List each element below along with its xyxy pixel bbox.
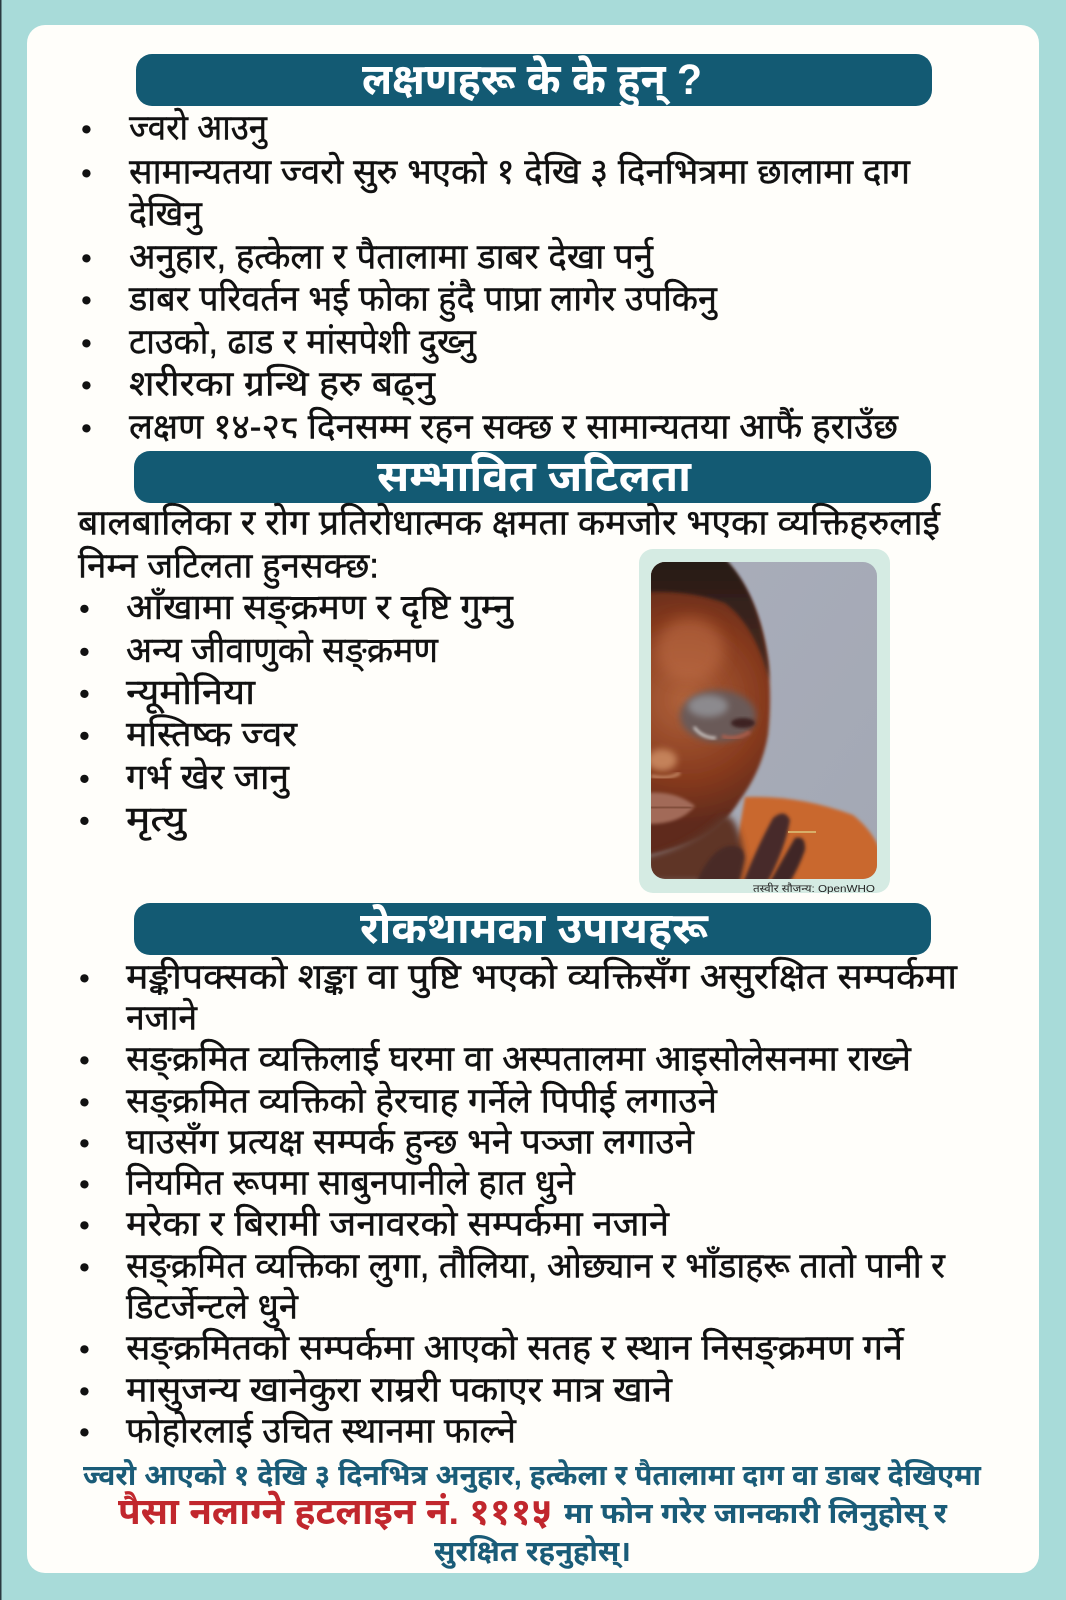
complications bullet list: •	[79, 803, 90, 838]
section: complications	[78, 451, 941, 895]
prevention bullet list: नजाने	[126, 998, 198, 1038]
footer hotline message: पैसा नलाग्ने हटलाइन नं. १११५	[118, 1490, 552, 1532]
footer hotline message: ज्वरो आएको १ देखि ३ दिनभित्र अनुहार, हत्केला र पैतालामा दाग वा डाबर देखिएमा	[83, 1458, 981, 1493]
prevention bullet list: मासुजन्य खानेकुरा राम्ररी पकाएर मात्र खाने	[126, 1370, 673, 1410]
symptoms bullet list: डाबर परिवर्तन भई फोका हुंदै पाप्रा लागेर उपकिनु	[128, 278, 718, 322]
prevention bullet list: सङ्क्रमितको सम्पर्कमा आएको सतह र स्थान निसङ्क्रमण गर्ने	[126, 1328, 905, 1369]
section: prevention	[79, 903, 958, 1450]
symptoms bullet list: •	[81, 156, 92, 190]
complications bullet list: •	[79, 591, 90, 626]
heading: prevention	[134, 903, 931, 955]
complications bullet list: •	[79, 718, 90, 753]
complications bullet list: मृत्यु	[126, 800, 187, 841]
heading: symptoms: लक्षणहरू के के हुन् ?	[362, 55, 702, 110]
forehead shine	[656, 618, 724, 682]
prevention bullet list: •	[79, 960, 90, 996]
photo credit caption: तस्वीर सौजन्य: OpenWHO	[753, 882, 875, 895]
footer hotline message	[83, 1458, 981, 1569]
symptoms bullet list: •	[81, 112, 92, 146]
section: symptoms	[81, 54, 932, 446]
symptoms bullet list: •	[81, 326, 92, 360]
complications bullet list: •	[79, 676, 90, 711]
complications bullet list: गर्भ खेर जानु	[126, 757, 290, 798]
shirt	[730, 797, 880, 882]
prevention bullet list: फोहोरलाई उचित स्थानमा फाल्ने	[126, 1410, 517, 1450]
symptoms bullet list: •	[81, 368, 92, 402]
symptoms bullet list: •	[81, 282, 92, 318]
prevention bullet list: •	[79, 1374, 90, 1408]
symptoms bullet list: देखिनु	[129, 194, 203, 234]
lips	[645, 793, 695, 824]
photo: child with eye infection	[645, 556, 880, 885]
prevention bullet list: मङ्कीपक्सको शङ्का वा पुष्टि भएको व्यक्तिसँग असुरक्षित सम्पर्कमा	[126, 956, 958, 998]
symptoms bullet list: शरीरका ग्रन्थि हरु बढ्नु	[129, 364, 436, 405]
complications bullet list: मस्तिष्क ज्वर	[126, 714, 298, 754]
symptoms bullet list: सामान्यतया ज्वरो सुरु भएको १ देखि ३ दिनभित्रमा छालामा दाग	[129, 152, 911, 192]
symptoms bullet list: अनुहार, हत्केला र पैतालामा डाबर देखा पर्नु	[129, 236, 654, 278]
complications bullet list: अन्य जीवाणुको सङ्क्रमण	[126, 630, 439, 671]
symptoms bullet list: ज्वरो आउनु	[129, 108, 268, 148]
heading: complications: सम्भावित जटिलता	[377, 452, 692, 501]
prevention bullet list: डिटर्जेन्टले धुने	[126, 1286, 299, 1328]
footer hotline message: सुरक्षित रहनुहोस्।	[434, 1535, 631, 1569]
photo panel with caption	[639, 549, 890, 895]
complications intro text	[78, 502, 941, 590]
heading: complications	[134, 451, 931, 503]
prevention bullet list	[79, 956, 958, 1450]
heading: symptoms	[136, 54, 932, 110]
prevention bullet list: सङ्क्रमित व्यक्तिलाई घरमा वा अस्पतालमा आइसोलेसनमा राख्ने	[126, 1038, 912, 1080]
fingers	[697, 846, 746, 879]
symptoms bullet list	[81, 108, 911, 446]
prevention bullet list: •	[79, 1250, 90, 1284]
prevention bullet list: •	[79, 1332, 90, 1366]
complications bullet list	[79, 587, 514, 841]
prevention bullet list: नियमित रूपमा साबुनपानीले हात धुने	[126, 1162, 576, 1204]
prevention bullet list: •	[79, 1084, 90, 1120]
complications bullet list: •	[79, 761, 90, 796]
complications bullet list: आँखामा सङ्क्रमण र दृष्टि गुम्नु	[126, 587, 514, 629]
eye bruise	[680, 690, 756, 742]
hair	[645, 556, 769, 680]
prevention bullet list: •	[79, 1126, 90, 1160]
prevention bullet list: सङ्क्रमित व्यक्तिको हेरचाह गर्नेले पिपीई लगाउने	[126, 1080, 718, 1122]
complications intro text: निम्न जटिलता हुनसक्छ:	[78, 546, 379, 590]
prevention bullet list: •	[79, 1166, 90, 1202]
symptoms bullet list: टाउको, ढाड र मांसपेशी दुख्नु	[129, 322, 477, 364]
symptoms bullet list: लक्षण १४-२८ दिनसम्म रहन सक्छ र सामान्यतया आफैं हराउँछ	[129, 406, 899, 446]
prevention bullet list: मरेका र बिरामी जनावरको सम्पर्कमा नजाने	[126, 1204, 670, 1244]
nose	[647, 749, 677, 771]
heading: prevention: रोकथामका उपायहरू	[360, 904, 709, 953]
complications bullet list: न्यूमोनिया	[126, 672, 256, 714]
neck and hand base	[645, 815, 745, 882]
prevention bullet list: •	[79, 1208, 90, 1242]
symptoms bullet list: •	[81, 410, 92, 446]
footer hotline message: मा फोन गरेर जानकारी लिनुहोस् र	[564, 1496, 948, 1531]
prevention bullet list: घाउसँग प्रत्यक्ष सम्पर्क हुन्छ भने पञ्जा लगाउने	[126, 1122, 695, 1166]
prevention bullet list: •	[79, 1042, 90, 1078]
symptoms bullet list: •	[81, 240, 92, 276]
complications bullet list: •	[79, 634, 90, 669]
face	[645, 556, 770, 856]
prevention bullet list: सङ्क्रमित व्यक्तिका लुगा, तौलिया, ओछ्यान र भाँडाहरू तातो पानी र	[126, 1246, 946, 1287]
prevention bullet list: •	[79, 1414, 90, 1450]
complications intro text: बालबालिका र रोग प्रतिरोधात्मक क्षमता कमजोर भएका व्यक्तिहरुलाई	[78, 502, 941, 542]
